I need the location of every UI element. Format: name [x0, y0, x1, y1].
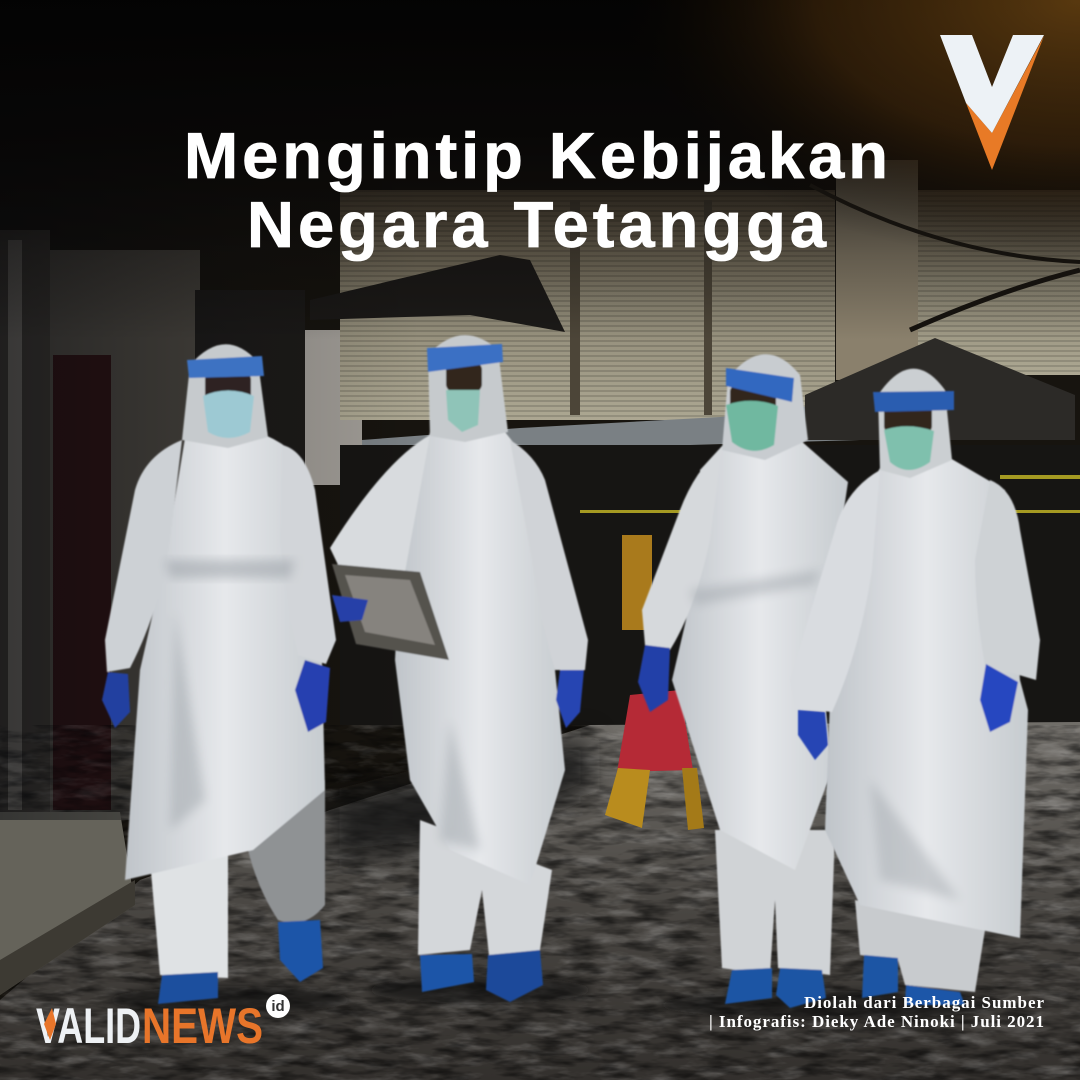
hood	[878, 369, 952, 478]
gloves	[638, 645, 670, 712]
person 2	[330, 335, 588, 1002]
logo: Validnews.id	[36, 994, 290, 1054]
source credit	[709, 993, 1044, 1031]
logo: Validnews.id: id	[271, 998, 285, 1015]
left wall	[0, 250, 200, 820]
gown	[125, 435, 325, 880]
sleeve	[642, 448, 722, 650]
hood	[182, 344, 268, 448]
white wall middle	[305, 330, 362, 485]
sleeves	[790, 470, 880, 712]
source credit: | Infografis: Dieky Ade Ninoki | Juli 2021	[709, 1012, 1044, 1031]
shoe covers	[862, 955, 898, 998]
shutters	[340, 190, 835, 420]
source credit: Diolah dari Berbagai Sumber	[804, 993, 1044, 1012]
title: Negara Tetangga	[247, 188, 827, 261]
person 1	[102, 344, 336, 1004]
title: Mengintip Kebijakan	[184, 119, 888, 192]
gloves	[980, 664, 1018, 732]
folds	[165, 560, 295, 578]
folds	[440, 720, 480, 850]
gown	[395, 432, 565, 885]
dark stall	[340, 445, 1080, 725]
logo: Validnews.id: VALID	[36, 998, 141, 1054]
trousers	[150, 850, 228, 978]
person 4	[790, 369, 1040, 1005]
folds	[870, 780, 960, 900]
shoe covers	[725, 968, 772, 1004]
sleeves	[330, 435, 430, 590]
gloves	[332, 595, 368, 622]
logo: V mark	[940, 35, 1044, 170]
shoe covers	[158, 972, 218, 1004]
gown	[825, 458, 1028, 938]
trousers	[855, 900, 985, 992]
clipboard	[332, 564, 449, 660]
sleeves	[105, 440, 182, 672]
gloves	[102, 672, 130, 728]
title	[184, 119, 888, 261]
awning	[310, 255, 565, 332]
gown	[672, 440, 848, 870]
trousers	[715, 830, 835, 975]
corrugated roof	[362, 400, 860, 465]
shoe covers	[420, 954, 474, 992]
person 3	[638, 354, 848, 1008]
hood	[428, 335, 508, 442]
hood	[722, 354, 808, 460]
trousers	[418, 820, 552, 965]
ground	[0, 722, 1080, 1080]
dark gradient overlays	[0, 0, 1080, 340]
person walking behind: red bag and yellow boots	[605, 690, 704, 830]
logo: Validnews.id: NEWS	[142, 998, 263, 1054]
folds	[690, 570, 820, 605]
